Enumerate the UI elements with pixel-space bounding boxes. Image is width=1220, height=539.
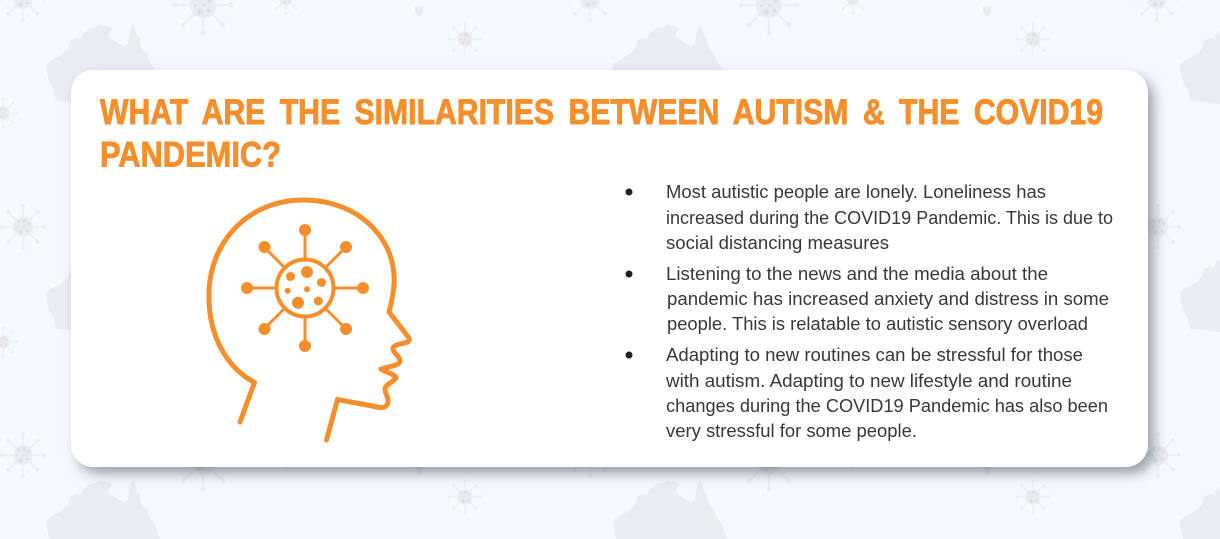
bullet 3: Adapting to new routines can be stressful for those: [666, 345, 1083, 365]
icon: head outline: [209, 200, 409, 440]
bullet 2: pandemic has increased anxiety and distress in some: [667, 289, 1109, 309]
bullet 2: [626, 264, 1109, 334]
bullet 1: increased during the COVID19 Pandemic. This is due to: [666, 208, 1113, 228]
panel: white card: [71, 70, 1148, 467]
bullet 1: social distancing measures: [666, 233, 889, 253]
bullet 1: [626, 182, 1113, 253]
icon: head with virus: [209, 200, 409, 440]
title: PANDEMIC?: [100, 136, 281, 174]
bullet list: [626, 182, 1113, 441]
bullet 3: [626, 345, 1108, 441]
title: [100, 93, 1103, 174]
bullet 3: changes during the COVID19 Pandemic has also been: [666, 396, 1108, 416]
icon: virus: [241, 224, 369, 352]
bullet 3: with autism. Adapting to new lifestyle and routine: [665, 371, 1072, 391]
bullet 2: Listening to the news and the media about the: [666, 264, 1048, 284]
bullet 2: people. This is relatable to autistic sensory overload: [667, 314, 1088, 334]
bullet 3: very stressful for some people.: [666, 421, 917, 441]
bullet 1: Most autistic people are lonely. Loneliness has: [666, 182, 1046, 202]
